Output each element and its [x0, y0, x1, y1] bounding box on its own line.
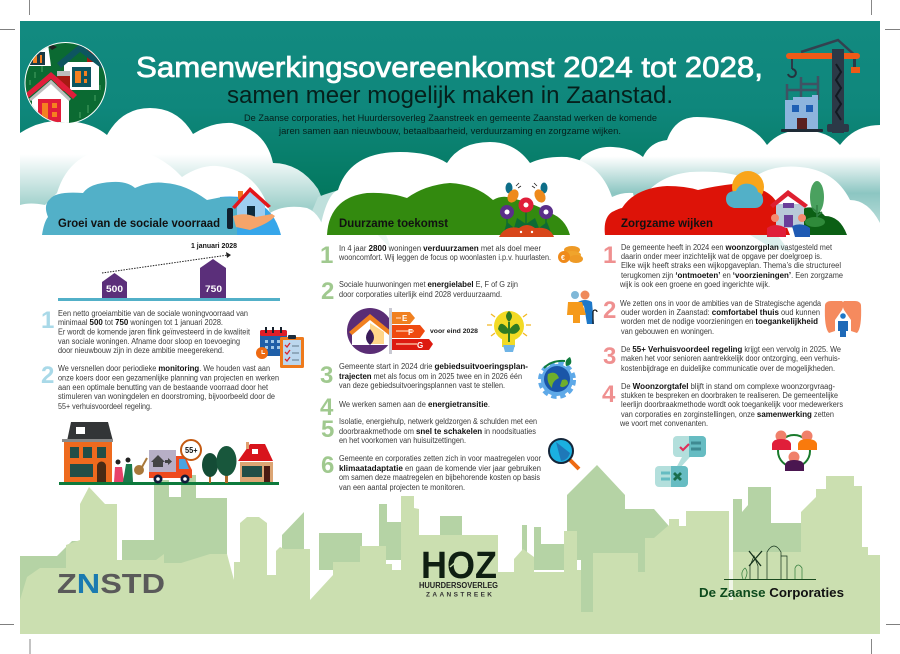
text block 3: De 55+ Verhuisvoordeel regeling krijgt een vervolg in 2025. We	[621, 344, 842, 354]
number 2: 2	[321, 278, 334, 305]
text block 4: De Woonzorgtafel blijft in stand om complexe woonzorgvraag-	[621, 381, 835, 391]
text block 1	[58, 309, 251, 355]
text block 1: daarin onder meer inzichtelijk wat de opgave per doelgroep is.	[621, 252, 822, 261]
text block 6	[339, 454, 541, 492]
text block 2: 55+ verhuisvoordeel regeling.	[58, 402, 152, 411]
text block 2: aan een optimale benutting van de bestaande voorraad door het	[58, 383, 269, 392]
heading: Zorgzame wijken	[621, 218, 713, 230]
text block 1: wijk is ook een groene en goed ingerichte wijk.	[619, 280, 770, 289]
icon: energy label: F	[408, 328, 413, 337]
clouds	[20, 108, 880, 252]
text block 1: terugkomen zijn ‘ontmoeten’ en ‘voorzieningen’. Een zorgzame	[621, 270, 844, 280]
icon: light bulb with plant	[487, 311, 531, 352]
logo: Huurdersoverleg Zaanstreek: HOZ	[421, 545, 497, 587]
icon: bees and flowers	[499, 182, 554, 237]
text block 3: van deze gebiedsuitvoeringsplannen vast te stellen.	[339, 381, 505, 390]
text block 5	[339, 417, 537, 445]
bar chart: growth 500 to 750: 500	[106, 284, 123, 294]
number 3: 3	[320, 362, 333, 389]
logo: De Zaanse Corporaties	[699, 546, 844, 600]
bar chart: growth 500 to 750	[58, 241, 280, 301]
text block 3	[621, 344, 842, 373]
icon: crane	[781, 40, 860, 133]
icon: coins: €	[561, 255, 565, 262]
text block 2: door corporaties uiterlijk eind 2028 verduurzaamd.	[339, 290, 502, 299]
text block 2	[58, 363, 279, 411]
text block 6: Gemeente en corporaties zetten zich in voor maatregelen voor	[339, 454, 541, 463]
icon: people circle	[772, 430, 817, 471]
text block 5: doorbraakmethode om snel te schakelen in noodsituaties	[339, 426, 536, 436]
icon: coins	[558, 246, 583, 263]
text block 2: van gebouwen en woningen.	[621, 327, 714, 336]
text block 3: kostenbijdrage en duidelijke communicatie over de mogelijkheden.	[621, 364, 835, 373]
icon: house on hand	[227, 187, 275, 230]
text block 1: door nieuwbouw zijn in deze ambitie meegerekend.	[58, 346, 224, 355]
number 2: 2	[41, 362, 54, 389]
icon: magnifying glass	[549, 439, 579, 469]
text block 1: van sociale woningen. Afname door sloop en toevoeging	[58, 337, 240, 346]
number 1: 1	[41, 307, 54, 334]
panel: zorgzame wijken	[602, 171, 861, 487]
panel: duurzame toekomst	[320, 182, 597, 492]
text block 1: Er wordt de komende jaren flink geïnvesteerd in de kwaliteit	[58, 328, 251, 336]
text block 2: worden met de nodige voorzieningen en toegankelijkheid	[620, 316, 818, 326]
text block 1	[338, 243, 551, 262]
text block 2	[339, 279, 518, 299]
text block 1: De gemeente heeft in 2024 een woonzorgplan vastgesteld met	[621, 242, 833, 252]
icon: calendar and checklist	[256, 327, 304, 368]
text block 3: Gemeente start in 2024 drie gebiedsuitvoeringsplan-	[339, 361, 528, 371]
text block 3	[339, 361, 528, 390]
bar chart: growth 500 to 750: 750	[205, 284, 222, 294]
icon: energy label: E	[402, 314, 408, 323]
text block 1: Een netto groeiambitie van de sociale woningvoorraad van	[58, 309, 248, 318]
text block 4: We werken samen aan de energietransitie.	[339, 399, 490, 409]
title line 1: Samenwerkingsovereenkomst 2024 tot 2028,	[136, 52, 763, 84]
text block 1: Elke wijk heeft straks een wijkopgaveplan. Thema’s die structureel	[621, 261, 841, 270]
icon: energy label: G	[417, 341, 423, 350]
number 6: 6	[321, 452, 334, 479]
text block 2: Sociale huurwoningen met energielabel E, F of G zijn	[339, 279, 518, 289]
logo: De Zaanse Corporaties: De Zaanse Corporaties	[699, 585, 844, 600]
heading: Duurzame toekomst	[339, 218, 448, 230]
number 2: 2	[603, 297, 616, 324]
text block 4: van corporaties en zorginstellingen, onze samenwerking zetten	[621, 409, 834, 419]
logo: ZNSTD: ZNSTD	[57, 568, 165, 599]
text block 1: wooncomfort. Wij leggen de focus op woonlasten i.p.v. huurlasten.	[338, 253, 551, 262]
number 3: 3	[603, 343, 616, 370]
intro text: De Zaanse corporaties, het Huurdersoverleg Zaanstreek en gemeente Zaanstad werken de komende	[244, 113, 657, 123]
number 4: 4	[602, 381, 616, 408]
text block 6: van een aantal projecten te monitoren.	[339, 483, 465, 492]
number 5: 5	[321, 416, 334, 443]
text block 3: trajecten met als focus om in 2025 twee en in 2026 één	[339, 371, 522, 381]
panel: groei van de sociale voorraad	[41, 182, 304, 485]
illustration: street with moving van	[59, 422, 279, 485]
text block 2: ouder worden in Zaanstad: comfortabel thuis oud kunnen	[621, 307, 820, 317]
text block 4: stukken te bespreken en doorbraken te realiseren. De gemeentelijke	[621, 391, 838, 400]
text block 5: en het voorkomen van huisuitzettingen.	[339, 436, 466, 445]
text block 4	[619, 381, 843, 428]
heading shape: red and green cloud	[605, 184, 847, 235]
title line 2: samen meer mogelijk maken in Zaanstad.	[227, 82, 673, 109]
text block 3: maken het voor senioren aantrekkelijk door ontzorging, een verhuis-	[621, 354, 840, 363]
logo: Huurdersoverleg Zaanstreek: HUURDERSOVERLEG	[419, 581, 498, 590]
icon: hands protecting person	[825, 301, 861, 337]
icon: sun, cloud, house and people	[726, 171, 825, 237]
icon: elderly couple	[567, 290, 597, 324]
text block 2: We versnellen door periodieke monitoring. We houden vast aan	[58, 363, 270, 373]
skyline	[20, 465, 880, 634]
text block 2: onze koers door een gezamenlijke planning van projecten en werken	[58, 374, 279, 382]
icon: chat bubbles	[655, 436, 706, 487]
bar chart: growth 500 to 750: 1 januari 2028	[191, 241, 237, 250]
number 1: 1	[603, 242, 616, 269]
illustration: street with moving van: 55+	[185, 446, 198, 455]
number 4: 4	[320, 394, 334, 421]
text block 2	[620, 299, 821, 336]
text block 2: We zetten ons in voor de ambities van de Strategische agenda	[620, 299, 821, 308]
header background	[20, 21, 880, 236]
icon: houses circle	[24, 42, 108, 126]
label: voor eind 2028: voor eind 2028	[430, 328, 478, 335]
text block 5: Isolatie, energiehulp, netwerk geldzorgen & schulden met een	[339, 417, 537, 426]
title	[136, 52, 763, 136]
icon: energy label	[347, 308, 433, 354]
intro text	[244, 113, 657, 136]
text block 2: stimuleren van woningdelen en doorstroming, bijvoorbeeld door de	[58, 392, 275, 401]
heading shape: blue cloud	[42, 182, 281, 235]
text block 1: In 4 jaar 2800 woningen verduurzamen met als doel meer	[339, 243, 541, 253]
text block 1: minimaal 500 tot 750 woningen tot 1 januari 2028.	[58, 317, 223, 327]
heading shape: green cloud	[327, 183, 570, 235]
number 1: 1	[320, 242, 333, 269]
heading: Groei van de sociale voorraad	[58, 218, 220, 230]
text block 1	[619, 242, 844, 289]
logo: Huurdersoverleg Zaanstreek: ZAANSTREEK	[426, 592, 492, 598]
intro text: jaren samen aan nieuwbouw, betaalbaarheid, verduurzaming en zorgzame wijken.	[278, 126, 621, 136]
text block 6: klimaatadaptatie en gaan de komende vier jaar gebruiken	[339, 463, 541, 473]
text block 4: leerlijn doorbraakmethode wordt ook toegankelijk voor medewerkers	[621, 400, 843, 409]
text block 6: om samen deze maatregelen en bijbehorende kosten op basis	[339, 473, 540, 482]
icon: globe with gear	[541, 357, 573, 396]
text block 4: we voort met convenanten.	[619, 419, 708, 428]
